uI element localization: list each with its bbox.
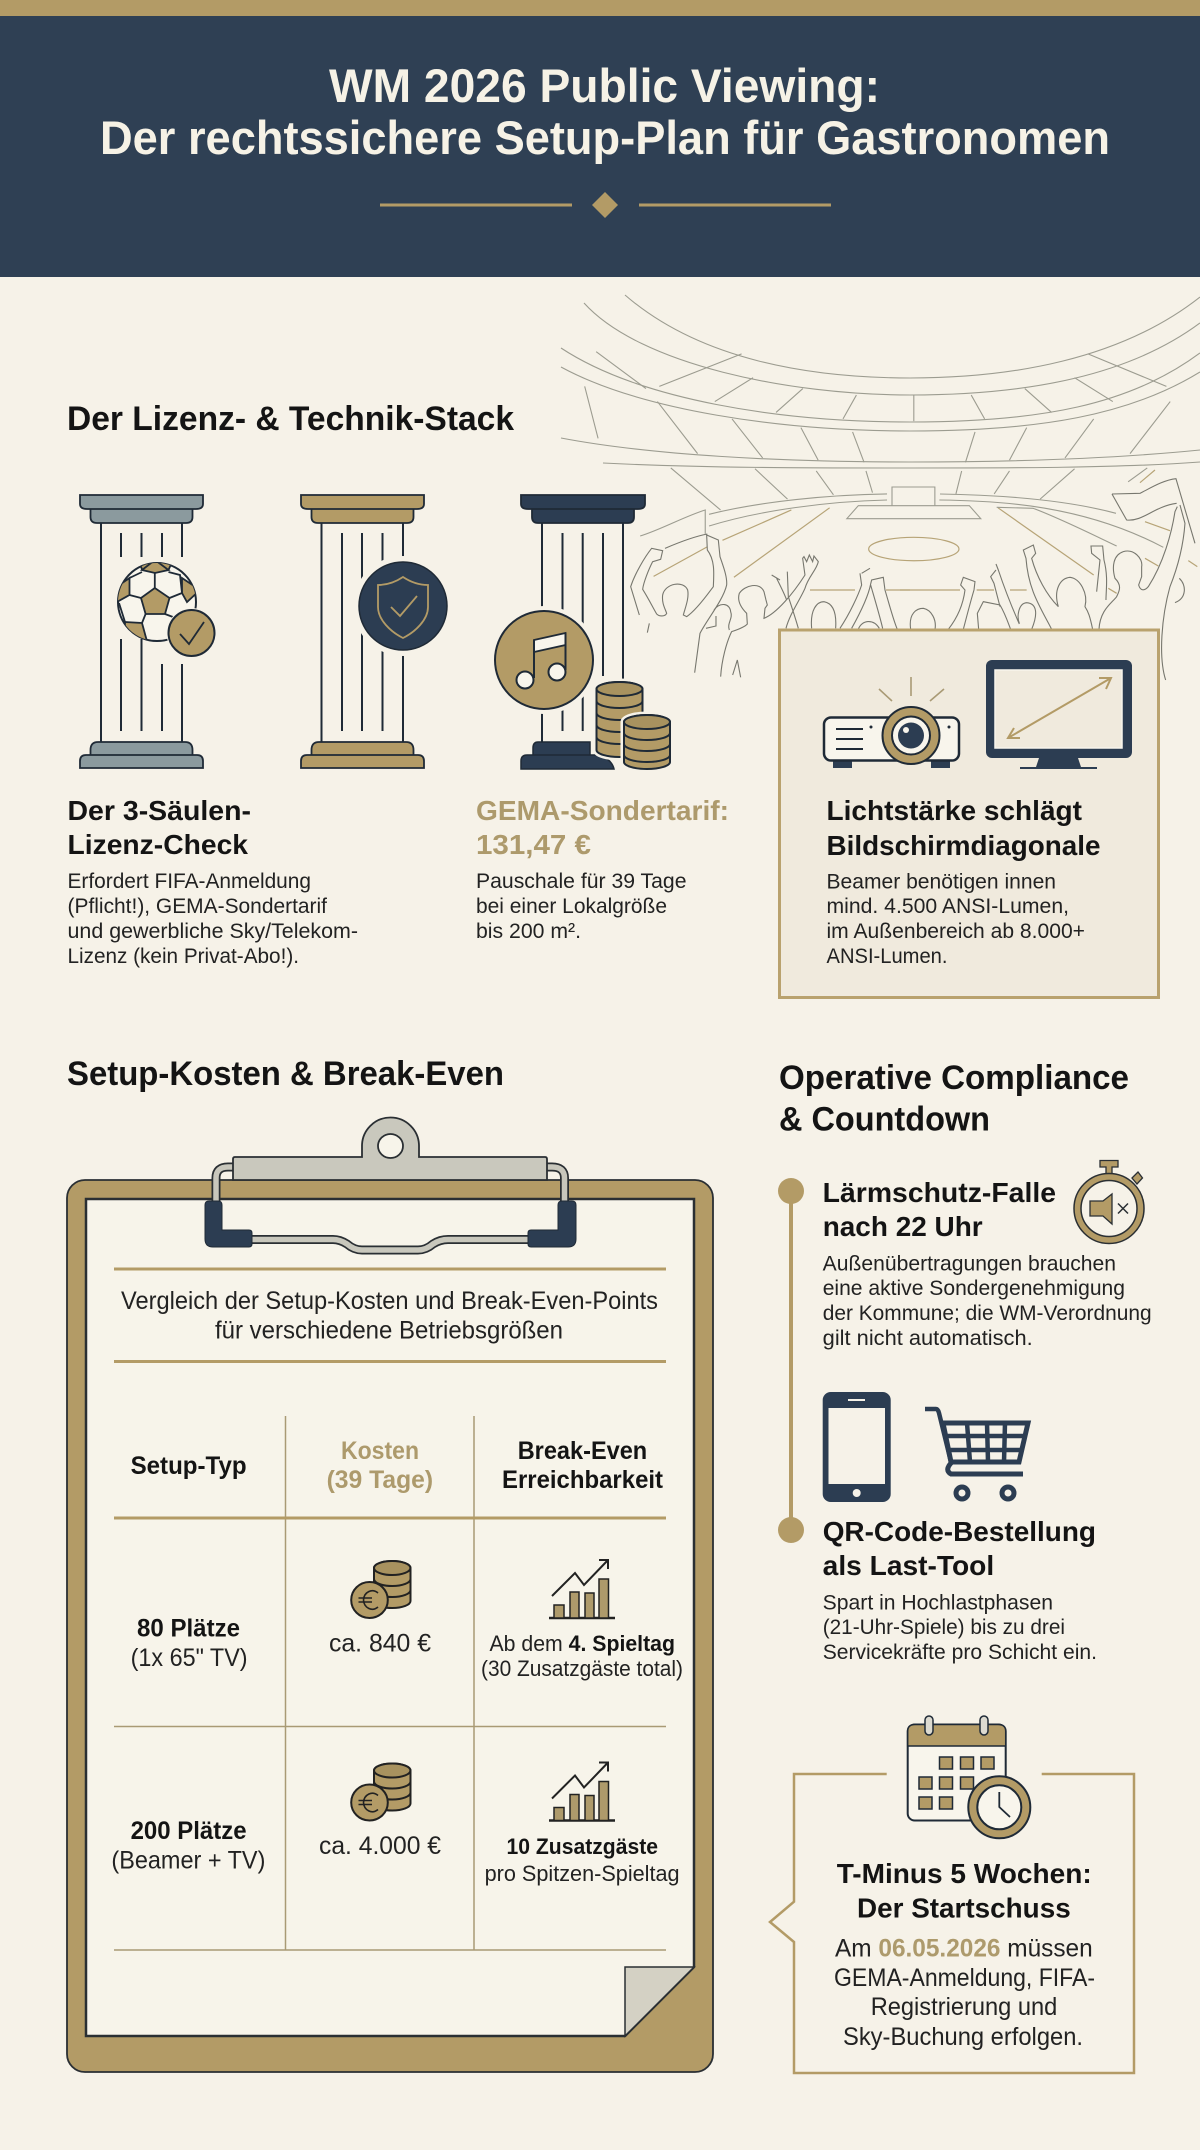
text block: GEMA-Sondertarif bbox=[476, 795, 729, 943]
table row: 200 Plätze: (Beamer + TV) bbox=[111, 1846, 265, 1874]
table header: Setup-Typ bbox=[131, 1452, 247, 1480]
title bbox=[100, 59, 1110, 164]
header banner bbox=[0, 0, 1200, 277]
clipboard clip bbox=[205, 1118, 576, 1250]
text: Der Startschuss: GEMA-Anmeldung, FIFA- bbox=[834, 1964, 1095, 1992]
text block: Lärmschutz-Falle: eine aktive Sondergenehmigung bbox=[823, 1277, 1125, 1300]
text: Der Startschuss: Registrierung und bbox=[871, 1993, 1057, 2021]
heading: Lizenz und Technik: Der Lizenz- & Technik-Stack bbox=[67, 400, 514, 438]
table row: 80 Plätze bbox=[131, 1560, 683, 1681]
stadium and crowd line drawing bbox=[561, 295, 1200, 680]
table header: Kosten bbox=[341, 1437, 419, 1465]
text: Lichtstärke schlägt Bildschirmdiagonale: ANSI-Lumen. bbox=[826, 945, 948, 968]
panel: Lichtstärke bbox=[780, 630, 1158, 998]
text: Der Startschuss: Am 06.05.2026 müssen bbox=[835, 1934, 1093, 1962]
table row: 80 Plätze: ca. 840 € bbox=[329, 1630, 431, 1658]
text block: 3-Säulen-Lizenz-Check: Der 3-Säulen- bbox=[68, 795, 251, 826]
icon: coins and euro bbox=[351, 1561, 410, 1618]
text block: 3-Säulen-Lizenz-Check bbox=[68, 795, 358, 968]
text: Der Startschuss: T-Minus 5 Wochen: bbox=[837, 1858, 1092, 1889]
text: Der Startschuss: Sky-Buchung erfolgen. bbox=[843, 2023, 1083, 2051]
icon: shopping cart bbox=[925, 1409, 1028, 1499]
text block: QR-Code-Bestellung: (21-Uhr-Spiele) bis zu drei bbox=[823, 1616, 1065, 1639]
icon: stopwatch with muted speaker bbox=[1074, 1160, 1144, 1244]
text: Der Startschuss bbox=[834, 1858, 1095, 2051]
text block: GEMA-Sondertarif: bis 200 m². bbox=[476, 920, 581, 943]
text block: QR-Code-Bestellung: als Last-Tool bbox=[823, 1550, 994, 1581]
table row: 80 Plätze: Ab dem 4. Spieltag bbox=[490, 1631, 675, 1656]
text block: 3-Säulen-Lizenz-Check: Lizenz (kein Privat-Abo!). bbox=[68, 945, 299, 968]
icon: projector bbox=[824, 677, 959, 768]
icon: coin stacks bbox=[596, 682, 670, 769]
table row: 200 Plätze: ca. 4.000 € bbox=[319, 1832, 441, 1860]
table row: 200 Plätze: 10 Zusatzgäste bbox=[506, 1834, 658, 1859]
table header: Break-Even bbox=[518, 1437, 647, 1465]
text block: 3-Säulen-Lizenz-Check: (Pflicht!), GEMA-Sondertarif bbox=[68, 895, 327, 918]
pillar 1: FIFA registration bbox=[80, 495, 216, 768]
text: Lichtstärke schlägt Bildschirmdiagonale bbox=[826, 795, 1100, 968]
text block: Lärmschutz-Falle: gilt nicht automatisch. bbox=[823, 1327, 1033, 1350]
table caption: für verschiedene Betriebsgrößen bbox=[215, 1316, 563, 1344]
text: Lichtstärke schlägt Bildschirmdiagonale: mind. 4.500 ANSI-Lumen, bbox=[826, 895, 1069, 918]
text: Lichtstärke schlägt Bildschirmdiagonale: Bildschirmdiagonale bbox=[826, 830, 1100, 861]
heading: Setup-Kosten: Setup-Kosten & Break-Even bbox=[67, 1055, 504, 1093]
table row: 80 Plätze: 80 Plätze bbox=[137, 1614, 240, 1642]
text block: Lärmschutz-Falle: der Kommune; die WM-Verordnung bbox=[823, 1302, 1152, 1325]
pillar 2: commercial broadcast licence bbox=[301, 495, 453, 768]
icon: check badge bbox=[166, 608, 216, 658]
icon: calendar with clock bbox=[908, 1716, 1030, 1838]
icon: growth chart bbox=[549, 1560, 615, 1618]
table header bbox=[131, 1437, 664, 1494]
text block: GEMA-Sondertarif: Pauschale für 39 Tage bbox=[476, 870, 686, 893]
table header: (39 Tage) bbox=[327, 1466, 433, 1494]
caption rules bbox=[114, 1268, 666, 1363]
table caption bbox=[121, 1287, 658, 1344]
heading: Operative Compliance: Operative Compliance bbox=[779, 1059, 1129, 1097]
icon: football bbox=[112, 557, 200, 664]
timeline bbox=[778, 1178, 804, 1543]
text block: QR-Code-Bestellung bbox=[823, 1516, 1097, 1664]
text: Lichtstärke schlägt Bildschirmdiagonale: Lichtstärke schlägt bbox=[826, 795, 1082, 826]
text block: 3-Säulen-Lizenz-Check: Lizenz-Check bbox=[68, 829, 248, 860]
title: WM 2026 Public Viewing: bbox=[329, 59, 880, 112]
table row: 200 Plätze: pro Spitzen-Spieltag bbox=[485, 1861, 680, 1886]
table row: 80 Plätze: (1x 65" TV) bbox=[131, 1644, 248, 1672]
pillar 3: GEMA tariff bbox=[490, 495, 670, 769]
icon: growth chart bbox=[549, 1762, 615, 1820]
paper fold bbox=[625, 1967, 694, 2036]
icon: monitor with diagonal bbox=[986, 660, 1132, 768]
icon: coins and euro bbox=[351, 1763, 410, 1820]
heading: Operative Compliance bbox=[779, 1059, 1129, 1138]
title divider with diamond bbox=[380, 192, 831, 218]
text block: Lärmschutz-Falle: nach 22 Uhr bbox=[823, 1211, 983, 1242]
title: Der rechtssichere Setup-Plan für Gastronomen bbox=[100, 111, 1110, 164]
table row: 200 Plätze: 200 Plätze bbox=[131, 1817, 247, 1845]
text: Lichtstärke schlägt Bildschirmdiagonale: Beamer benötigen innen bbox=[826, 870, 1056, 894]
heading: Operative Compliance: & Countdown bbox=[779, 1100, 990, 1138]
text block: Lärmschutz-Falle: Außenübertragungen brauchen bbox=[823, 1252, 1116, 1276]
icon: tablet bbox=[823, 1392, 891, 1502]
text block: GEMA-Sondertarif: bei einer Lokalgröße bbox=[476, 895, 667, 918]
text block: Lärmschutz-Falle bbox=[823, 1177, 1152, 1350]
text block: QR-Code-Bestellung: QR-Code-Bestellung bbox=[823, 1516, 1096, 1547]
text block: 3-Säulen-Lizenz-Check: Erfordert FIFA-Anmeldung bbox=[68, 870, 311, 893]
text block: QR-Code-Bestellung: Spart in Hochlastphasen bbox=[823, 1592, 1053, 1614]
text: Lichtstärke schlägt Bildschirmdiagonale: im Außenbereich ab 8.000+ bbox=[826, 920, 1085, 943]
text block: 3-Säulen-Lizenz-Check: und gewerbliche Sky/Telekom- bbox=[68, 920, 358, 943]
table row: 80 Plätze: (30 Zusatzgäste total) bbox=[481, 1656, 683, 1681]
table row: 200 Plätze bbox=[111, 1762, 680, 1886]
table header: Erreichbarkeit bbox=[502, 1466, 664, 1494]
table grid bbox=[114, 1416, 666, 1950]
clipboard paper bbox=[86, 1199, 694, 2036]
text block: GEMA-Sondertarif: GEMA-Sondertarif: bbox=[476, 795, 729, 826]
clipboard panel bbox=[67, 1118, 713, 2072]
text block: QR-Code-Bestellung: Servicekräfte pro Schicht ein. bbox=[823, 1641, 1097, 1664]
text block: GEMA-Sondertarif: 131,47 € bbox=[476, 829, 591, 860]
icon: music note bbox=[490, 606, 598, 714]
callout: T-Minus 5 Wochen bbox=[770, 1716, 1134, 2073]
text: Der Startschuss: Der Startschuss bbox=[857, 1892, 1071, 1924]
table caption: Vergleich der Setup-Kosten und Break-Even-Points bbox=[121, 1287, 658, 1315]
icon: shield badge bbox=[353, 556, 453, 656]
text block: Lärmschutz-Falle: Lärmschutz-Falle bbox=[823, 1177, 1056, 1208]
